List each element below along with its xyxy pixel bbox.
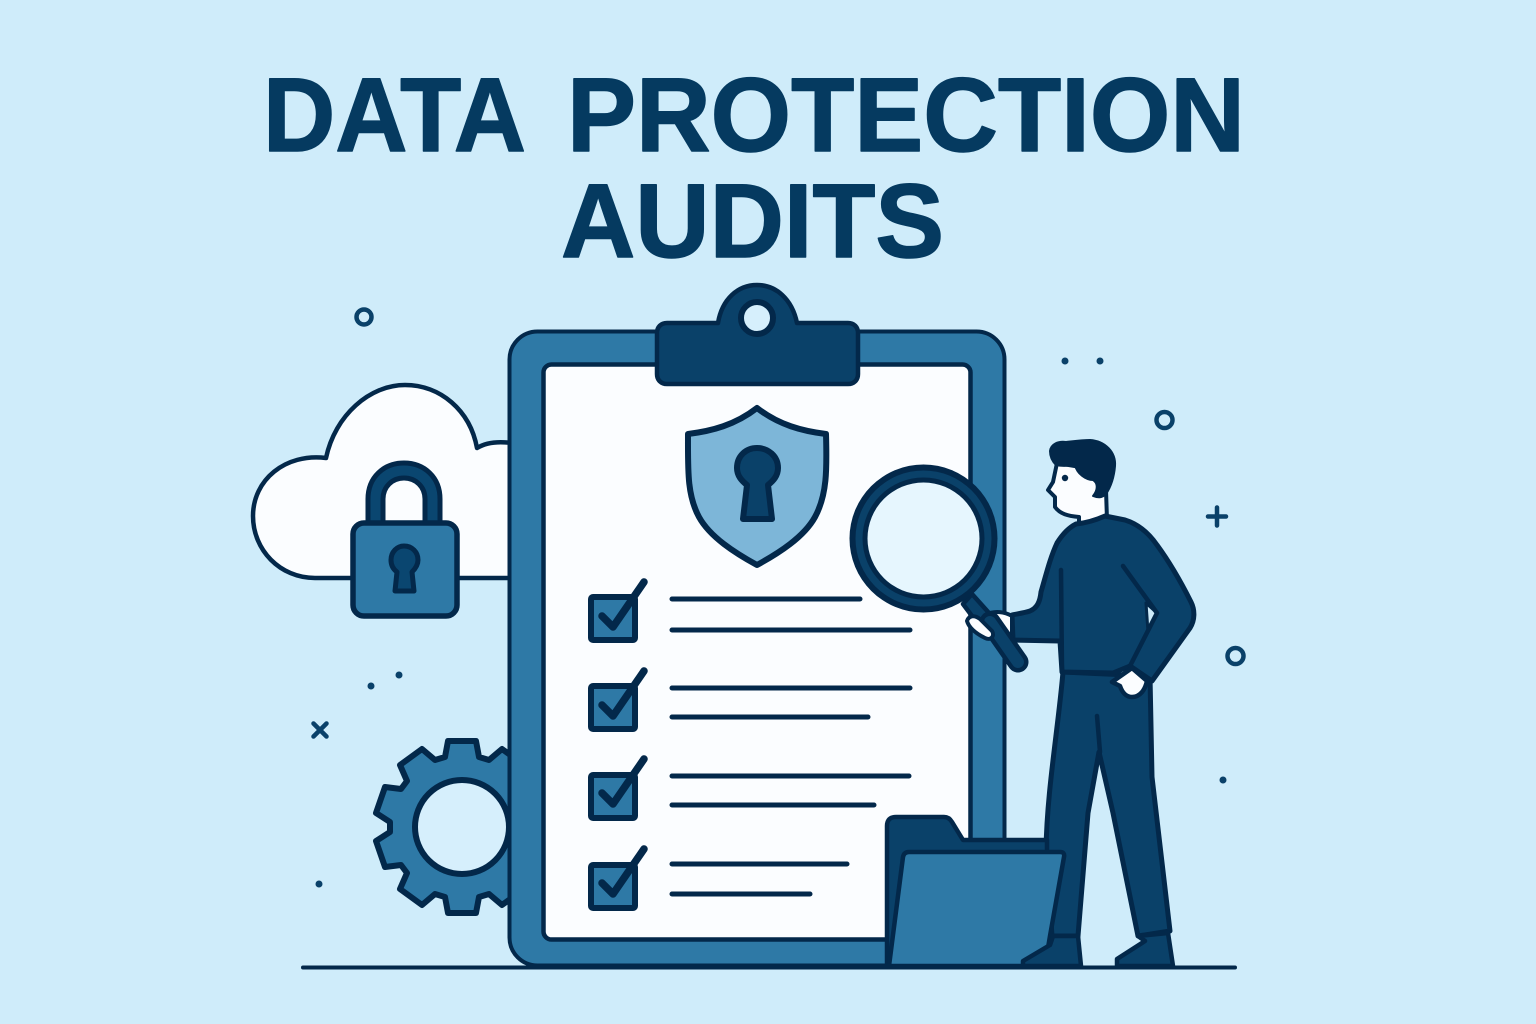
title: DATA [263,57,526,174]
hair [1050,440,1115,497]
paper sheet [544,364,970,940]
icon: magnifying glass [850,464,1018,662]
trousers [1046,672,1170,936]
ground line [303,966,1235,970]
checklist row 2 [591,671,910,729]
title: PROTECTION [567,57,1245,174]
panel: clipboard [510,332,1004,966]
arm gap [1146,603,1157,632]
hip hand [1112,668,1147,697]
decorative dots [316,358,1226,888]
folder [887,817,1064,966]
sweater folds [1061,566,1157,670]
shoes [1023,933,1173,966]
crease [1097,716,1100,752]
figure: auditor [887,440,1194,966]
icon: padlock [353,463,457,616]
title [263,57,1245,280]
decorative circles [356,310,1244,664]
sweater [1012,516,1194,681]
checklist row 1 [591,582,910,640]
decorative plus and cross [314,508,1226,736]
title: AUDITS [561,163,944,280]
icon: shield with keyhole [688,408,826,565]
clipboard clip [657,285,858,384]
checklist row 3 [591,759,909,818]
face and neck [1048,463,1107,526]
holding hand [985,612,1012,636]
checklist row 4 [591,849,847,908]
icon: cloud [253,385,512,578]
icon: gear [376,741,524,913]
